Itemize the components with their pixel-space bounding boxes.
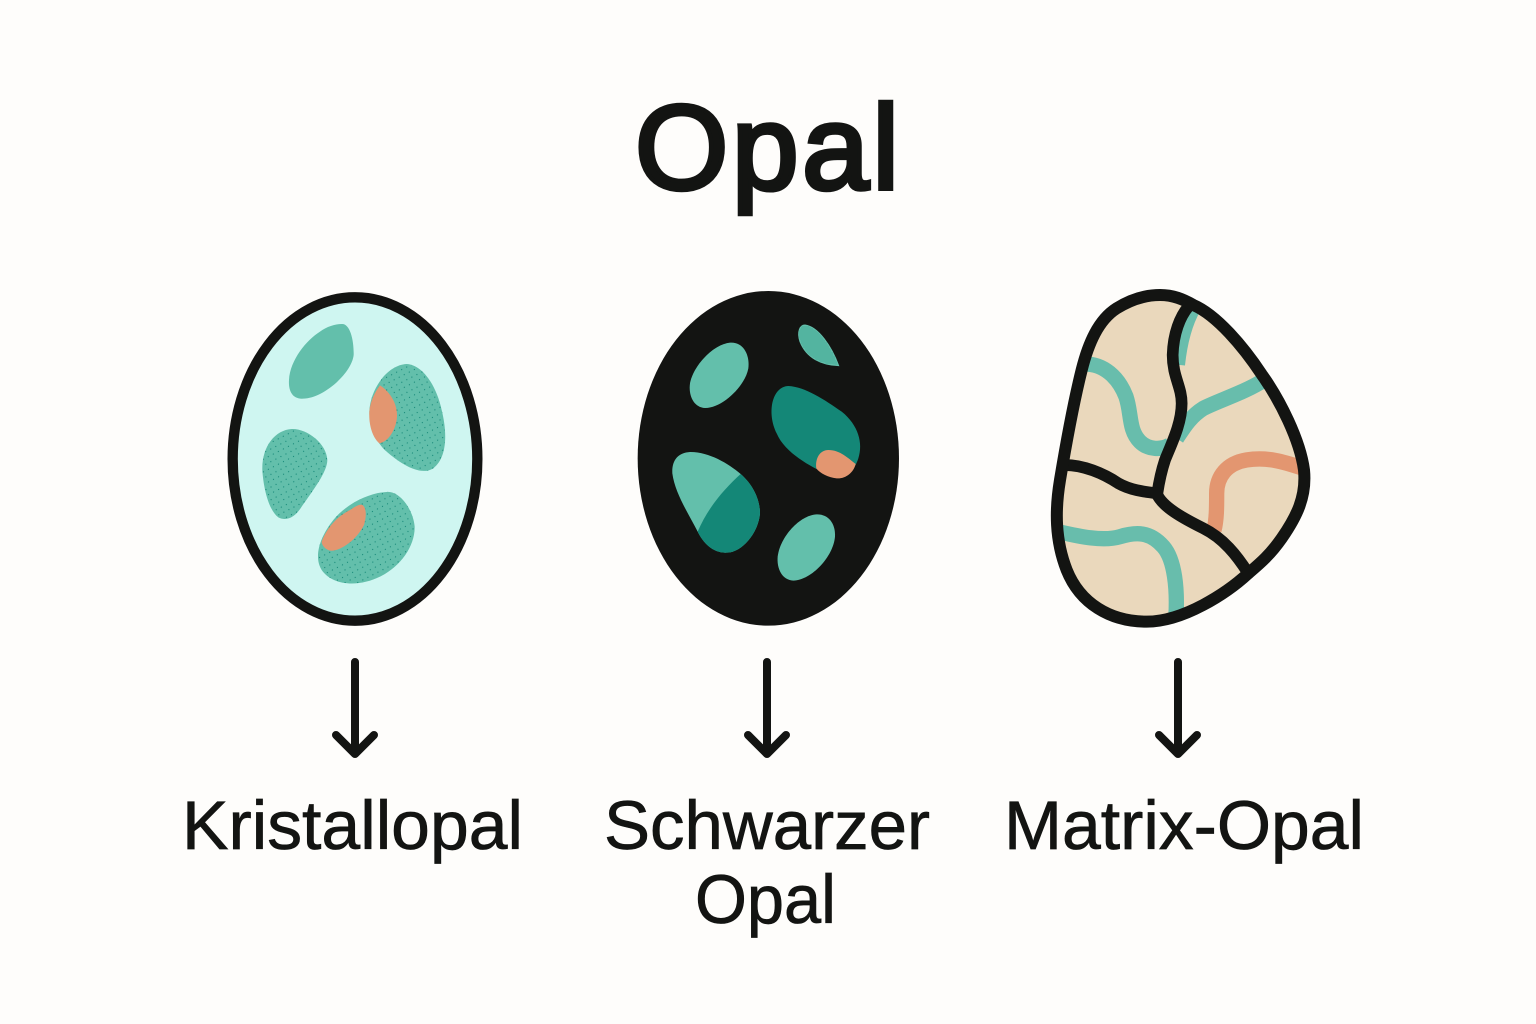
patch: bottom with orange (318, 492, 415, 583)
arrow: to Kristallopal (336, 662, 374, 754)
arrow: to Matrix-Opal (1159, 662, 1197, 754)
panel: Schwarzer Opal illustration (638, 291, 899, 626)
patch: right with orange (369, 364, 445, 471)
label: Schwarzer Opal (604, 787, 930, 938)
opal body: black (638, 291, 899, 626)
opal outline (1057, 295, 1304, 622)
patch: two-tone left (672, 452, 760, 553)
label: Matrix-Opal: Matrix-Opal (1004, 787, 1364, 864)
title: Opal (635, 81, 902, 215)
patch: plain upper left (289, 324, 354, 399)
label: Schwarzer Opal: Opal (695, 861, 836, 938)
label: Schwarzer Opal: Schwarzer (604, 787, 930, 864)
label: Kristallopal: Kristallopal (182, 787, 523, 864)
patch: bottom right (778, 514, 835, 581)
patch: upper left (690, 343, 749, 408)
panel: Kristallopal illustration (233, 297, 477, 621)
cracks (1065, 307, 1248, 573)
opal body: pale turquoise (233, 297, 477, 621)
veins (1058, 308, 1303, 615)
opal body fill: beige (1057, 295, 1304, 622)
panel: Matrix-Opal illustration (1057, 295, 1304, 622)
patch: teardrop upper right (799, 325, 839, 366)
patch: dark teal with orange (772, 386, 860, 478)
arrow: to Schwarzer Opal (748, 662, 786, 754)
patch: left dotted (262, 429, 327, 519)
